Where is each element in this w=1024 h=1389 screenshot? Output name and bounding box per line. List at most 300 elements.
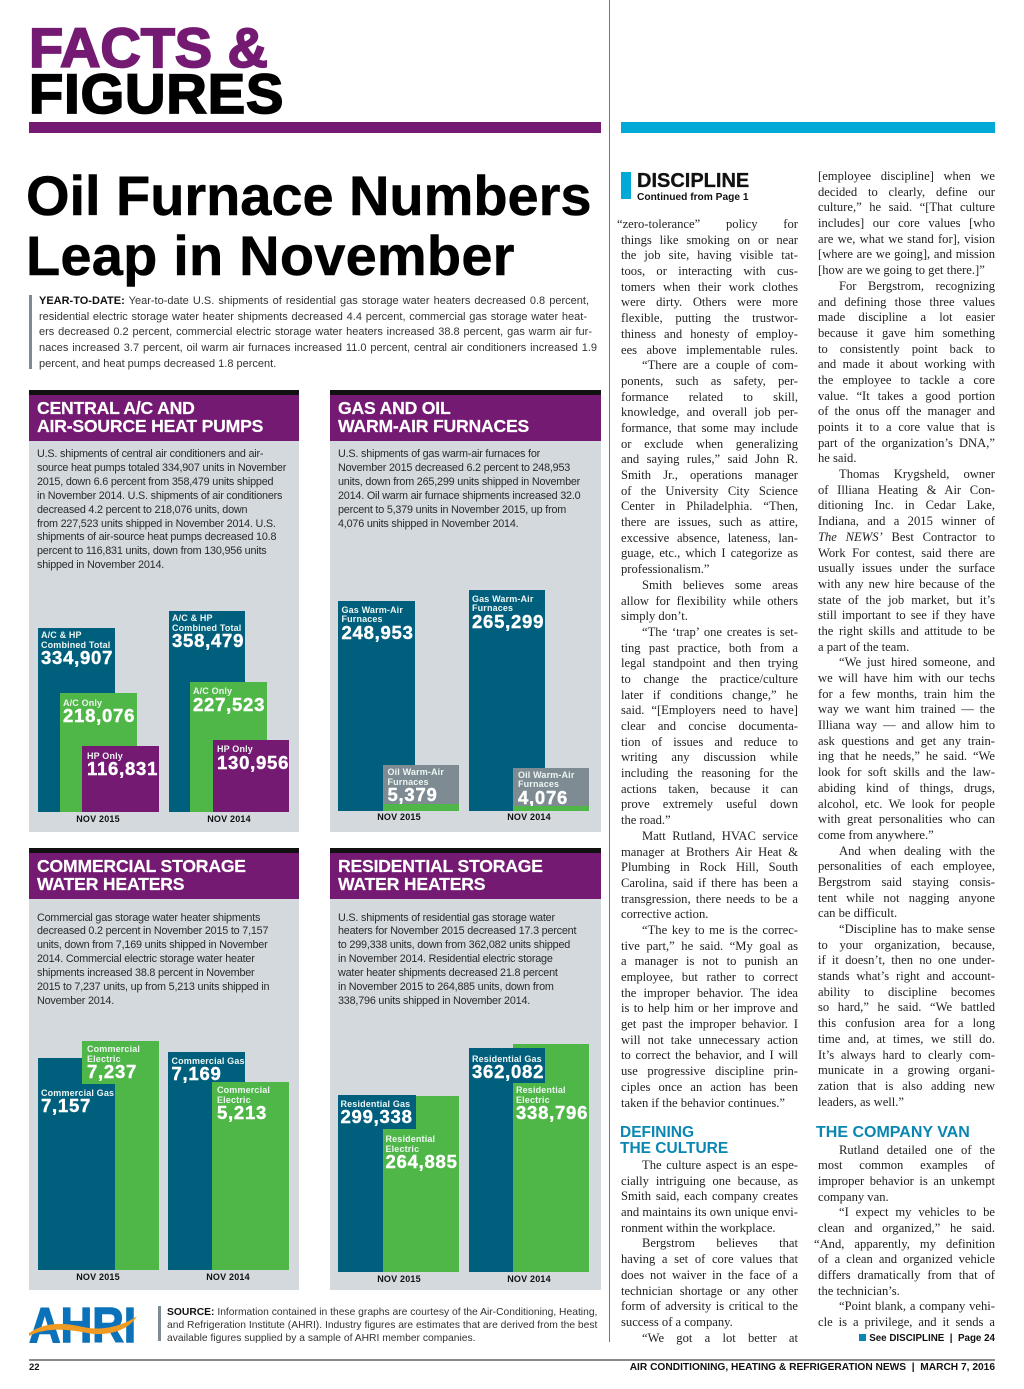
label box: commercial electric 2015: 7,237: [87, 1061, 137, 1082]
article column 1: to correct the behavior, and I will: [621, 1048, 798, 1062]
panel text: percent to 116,831 units, down from 130,956 units: [37, 545, 266, 557]
panel text: decreased 0.2 percent in November 2015 to 7,157: [37, 925, 268, 937]
article column 2: made discipline a lot easier: [818, 310, 995, 324]
source accent bar: [158, 1306, 161, 1341]
panel heading: [330, 848, 601, 899]
article column 2: the employee to tackle a core: [818, 373, 995, 387]
article column 2: and made it about working with: [818, 357, 995, 371]
panel text: decreased 4.2 percent to 218,076 units, down: [37, 504, 247, 516]
heading: Discipline: [637, 170, 749, 203]
article column 1: knowledge, and overall job per-: [621, 405, 798, 419]
bar: commercial electric 2014: Electric: [217, 1094, 251, 1104]
bar: A/C & HP 2015: [38, 628, 115, 812]
article column 1: “The ‘trap’ one creates is set-: [642, 625, 798, 639]
panel text: to 299,338 units, down from 362,082 units shipped: [338, 939, 570, 951]
panel text: 2014. Commercial electric storage water heater: [37, 953, 255, 965]
panel background: [29, 440, 299, 832]
article column 1: ees above implementable rules.: [621, 342, 798, 356]
article column 1: “zero-tolerance” policy for: [617, 217, 798, 231]
article column 2: tent while not nagging anyone: [818, 891, 995, 905]
article column 2: leaders, as well.”: [818, 1095, 904, 1109]
purple rule: [29, 122, 601, 133]
intro: year-to-date text: residential electric storage water heater shipments decreased 4.4 percent, commercial gas storage water heat-: [39, 311, 587, 323]
article column 2: Work For contest, said there are: [818, 546, 995, 560]
bar: gas furnaces 2015: [338, 601, 415, 811]
article column 1: said. “[Employers need to have]: [621, 703, 798, 717]
article column 1: allow for flexibility while others: [621, 594, 798, 608]
article column 2 lower: company van.: [818, 1190, 889, 1204]
article column 2: the right skills and attitude to be: [818, 624, 995, 638]
article column 2 lower: cle is a privilege, and it sends a: [818, 1315, 995, 1329]
intro: year-to-date text: percent, and heat pumps decreased 1.8 percent.: [39, 358, 276, 370]
bar: HP only 2015: 116,831: [87, 758, 158, 779]
bar: gas furnaces 2015: Furnaces: [342, 614, 383, 624]
article column 2: if it doesn’t, then no one under-: [818, 953, 995, 967]
article column 1 lower: Bergstrom believes that: [642, 1236, 798, 1250]
article column 1: the job site, having visible tat-: [621, 248, 798, 262]
bar: A/C only 2015: [60, 693, 137, 812]
article column 2: ability to discipline becomes: [818, 985, 995, 999]
panel: residential storage water heaters: 338,796 units shipped in November 2014.: [338, 995, 530, 1007]
label box: commercial electric 2015: Electric: [87, 1054, 121, 1064]
article column 2 lower: clean and organized,” he said.: [818, 1221, 995, 1235]
article column 2: zation that is also adding new: [818, 1079, 995, 1093]
bar: residential electric 2015: 264,885: [386, 1151, 458, 1172]
bar: residential electric 2014: Electric: [516, 1094, 550, 1104]
article column 1 lower: The culture aspect is an espe-: [642, 1158, 798, 1172]
label box: residential gas 2015: [338, 1095, 416, 1129]
blue rule: [621, 122, 995, 133]
bar: commercial gas 2014: [168, 1052, 245, 1270]
subheading: Defining the Culture: [620, 1124, 728, 1157]
article column 2: ing that he needs,” he said. “We: [818, 749, 995, 763]
article column 1 lower: form of adversity is critical to the: [621, 1299, 798, 1313]
source note: and Refrigeration Institute (AHRI). Industry figures are estimates that are derived from the best: [167, 1320, 597, 1331]
article column 1 lower: cially intriguing one because, as: [621, 1174, 798, 1188]
label box: residential gas 2015: Residential Gas: [340, 1098, 410, 1108]
article column 1 lower: does not waiver in the face of a: [621, 1268, 798, 1282]
article column 2 lower: of a clean and organized vehicle: [818, 1252, 995, 1266]
article column 2: for a few months, train him the: [818, 687, 995, 701]
bar: commercial electric 2014: 5,213: [217, 1102, 267, 1123]
article column 2: alcohol, etc. We look for people: [818, 796, 995, 810]
article column 1: ciples once an action has been: [621, 1080, 798, 1094]
article column 2: time and, at times, we still do.: [818, 1032, 995, 1046]
subheading: Defining the Culture: DEFINING: [620, 1124, 694, 1141]
axis label: NOV 2014: [507, 1274, 551, 1284]
panel text: source heat pumps totaled 334,907 units in November: [37, 462, 286, 474]
axis label: NOV 2015: [377, 1274, 421, 1284]
panel text: from 227,523 units shipped in November 2014. U.S.: [37, 518, 276, 530]
article column 2: ditioning Inc. in Cedar Lake,: [818, 498, 995, 512]
panel text: [37, 912, 269, 1007]
article column 2: “Discipline has to make sense: [839, 922, 995, 936]
article column 2: [where are we going], and mission: [818, 247, 995, 261]
panel heading: AIR-SOURCE HEAT PUMPS: [37, 416, 263, 436]
article column 2: For Bergstrom, recognizing: [839, 279, 995, 293]
article column 1: tomers when their work clothes: [621, 280, 798, 294]
bar: A/C & HP 2015: 334,907: [41, 647, 113, 668]
page number: 22: [29, 1362, 40, 1373]
bar: gas furnaces 2015: Gas Warm-Air: [342, 604, 403, 614]
article column 2: Thomas Krygsheld, owner: [839, 467, 995, 481]
bar: commercial electric 2014: [212, 1082, 289, 1270]
article column 1: corrective action.: [621, 907, 708, 921]
article column 2: can be difficult.: [818, 906, 897, 920]
intro: year-to-date text: naces increased 3.7 percent, oil warm air furnaces increased 11.0 percent, central air conditioners increased 1.9: [39, 342, 597, 354]
article column 1: writing any discussion while: [621, 750, 798, 764]
bar: commercial gas 2015: 7,157: [41, 1095, 91, 1116]
article column 2: way we want him trained — the: [818, 702, 995, 716]
panel text: November 2014.: [37, 995, 114, 1007]
axis label: NOV 2015: [76, 814, 120, 824]
article column 1: actions taken, because it can: [621, 782, 798, 796]
bar: A/C & HP 2014: [169, 611, 245, 812]
article column 2: culture,” he said. “[That culture: [818, 200, 995, 214]
panel background: [330, 898, 601, 1290]
article column 2 lower: differs dramatically from that of: [818, 1268, 995, 1282]
article column 1: Smith believes some areas: [642, 578, 798, 592]
article column 2: ask questions and get any train-: [818, 734, 995, 748]
bar: oil furnaces 2014: Oil Warm-Air: [518, 770, 574, 780]
article column 2: points it to a core value that is: [818, 420, 995, 434]
bar: commercial gas 2015: [38, 1058, 115, 1270]
bar: A/C only 2014: 227,523: [193, 694, 265, 714]
bar: gas furnaces 2014: 265,299: [472, 610, 544, 632]
bar: oil furnaces 2014: Furnaces: [518, 779, 559, 789]
article column 2: includes] our core values [who: [818, 216, 995, 230]
article column 2: with great personalities who can: [818, 812, 995, 826]
jump line: see Discipline: See DISCIPLINE | Page 24: [869, 1333, 995, 1344]
title: Oil Furnace Numbers: [26, 164, 591, 227]
bar: A/C only 2014: [190, 682, 267, 812]
panel text: units, down from 265,299 units shipped in November: [338, 476, 580, 488]
article column 2: [employee discipline] when we: [818, 169, 995, 183]
article column 1: and saying rules,” said John R.: [621, 452, 798, 466]
bar: residential electric 2015: Residential: [386, 1134, 435, 1144]
footer publication line: AIR CONDITIONING, HEATING & REFRIGERATION NEWS | MARCH 7, 2016: [630, 1362, 995, 1373]
panel heading: [29, 390, 299, 441]
article column 1: will not take unnecessary action: [621, 1033, 798, 1047]
article column 2: look for soft skills and the law-: [818, 765, 995, 779]
bar: oil furnaces 2015: 5,379: [388, 784, 438, 805]
article column 1 lower: [621, 1158, 798, 1345]
panel heading: [29, 848, 299, 899]
label box: residential gas 2014: 362,082: [472, 1061, 544, 1082]
bar: A/C & HP 2014: Combined Total: [172, 623, 241, 633]
article column 1: Center in Philadelphia. “Then,: [621, 499, 798, 513]
bar: commercial electric 2014: Commercial: [217, 1085, 270, 1095]
article column 2: a part of the team.: [818, 640, 909, 654]
article column 1: clear and concise documenta-: [621, 719, 798, 733]
panel heading: WARM-AIR FURNACES: [338, 416, 529, 436]
intro: year-to-date text: ers decreased 0.2 percent, commercial electric storage water heaters increased 38.8 percent, gas warm air fur-: [39, 326, 592, 338]
bar: HP only 2015: HP Only: [87, 750, 123, 760]
bar: gas furnaces 2014: [469, 590, 545, 811]
bar: HP only 2014: 130,956: [217, 752, 289, 772]
panel: central A/C and heat pumps: [29, 390, 299, 832]
title: [26, 164, 591, 287]
article column 1: manager at Brothers Air Heat &: [621, 844, 798, 858]
article column 1: Matt Rutland, HVAC service: [642, 829, 798, 843]
panel text: shipments increased 38.8 percent in November: [37, 967, 254, 979]
panel text: U.S. shipments of residential gas storage water: [338, 912, 555, 924]
bar: gas furnaces 2015: 248,953: [342, 622, 414, 642]
article column 2: municate in a growing organi-: [818, 1063, 995, 1077]
article column 1: ponents, such as safety, per-: [621, 374, 798, 388]
panel heading: [330, 390, 601, 441]
title: Leap in November: [26, 224, 515, 287]
article column 1: ting past practice, both from a: [621, 641, 798, 655]
article column 1: formance related to skill,: [621, 390, 798, 404]
label box: residential gas 2015: 299,338: [340, 1106, 413, 1127]
article column 2: and defining those three values: [818, 294, 995, 308]
panel text: U.S. shipments of central air conditioners and air-: [37, 448, 263, 460]
panel text: water heater shipments decreased 21.8 percent: [338, 967, 558, 979]
article column 1: tive part,” he said. “My goal as: [621, 939, 798, 953]
axis label: NOV 2014: [206, 1272, 250, 1282]
article column 2: come from anywhere.”: [818, 828, 934, 842]
article column 2 lower: the technician’s.: [818, 1284, 900, 1298]
bar: A/C & HP 2014: A/C & HP: [172, 613, 213, 623]
bar: oil furnaces 2015: Oil Warm-Air: [388, 767, 444, 777]
article column 2: Indiana, and a 2015 winner of: [818, 514, 995, 528]
article column 1 lower: Smith said, each company creates: [621, 1189, 798, 1203]
article column 1 lower: having a set of core values that: [621, 1252, 798, 1266]
article column 1: transgression, there needs to be a: [621, 892, 798, 906]
article column 2: personalities of each employee,: [818, 859, 995, 873]
panel background: [29, 898, 299, 1290]
article column 2: to consistently point back to: [818, 342, 995, 356]
panel heading: COMMERCIAL STORAGE: [37, 856, 246, 876]
article column 1: the improper behavior. The idea: [621, 986, 798, 1000]
article column 1: get past the improper behavior. I: [621, 1017, 798, 1031]
article column 1 lower: technician shortage or any other: [621, 1284, 798, 1298]
article column 2: still important to see if they have: [818, 608, 995, 622]
axis label: NOV 2014: [207, 814, 251, 824]
article column 2 lower: [814, 1142, 995, 1329]
article column 2 lower: “Point blank, a company vehi-: [839, 1299, 995, 1313]
article column 1 lower: success of a company.: [621, 1315, 733, 1329]
article column 2: this confusion area for a long: [818, 1016, 995, 1030]
bar: commercial gas 2014: 7,169: [172, 1063, 222, 1084]
panel text: in November 2015 to 264,885 units, down from: [338, 981, 554, 993]
article column 2: stands what’s right and account-: [818, 969, 995, 983]
bar: commercial gas 2015: Commercial Gas: [41, 1088, 114, 1098]
article column 1: “There are a couple of com-: [642, 358, 798, 372]
article column 1 lower: ronment within the workplace.: [621, 1221, 776, 1235]
panel text: November 2015 decreased 6.2 percent to 248,953: [338, 462, 570, 474]
panel text: 2015, down 6.6 percent from 358,479 units shipped: [37, 476, 273, 488]
article column 1: toos, or interacting with cus-: [621, 264, 798, 278]
article column 2: he said.: [818, 451, 856, 465]
article column 1: simply don’t.: [621, 609, 688, 623]
bar: residential electric 2015: Electric: [386, 1144, 419, 1154]
intro: year-to-date text: [39, 295, 597, 370]
article column 1: the road.”: [621, 813, 671, 827]
panel text: percent to 5,379 units in November 2015, up from: [338, 504, 566, 516]
subheading: Defining the Culture: THE CULTURE: [620, 1140, 728, 1157]
panel text: in November 2014. Residential electric storage: [338, 953, 553, 965]
panel text: 4,076 units shipped in November 2014.: [338, 518, 518, 530]
panel: gas and oil furnaces: [330, 390, 601, 832]
label box: residential gas 2014: [469, 1048, 545, 1083]
article column 1: [617, 217, 798, 1110]
article column 2: value. “It takes a good portion: [818, 389, 995, 403]
label box: residential gas 2014: Residential Gas: [472, 1054, 542, 1064]
article column 1: including the reasoning for the: [621, 766, 798, 780]
bar: HP only 2015: [82, 746, 159, 812]
panel heading: WATER HEATERS: [338, 874, 485, 894]
article column 2: Bergstrom said staying consis-: [818, 875, 995, 889]
article column 1: of the University City Science: [621, 484, 798, 498]
article column 2: “We just hired someone, and: [839, 655, 995, 669]
panel text: in November 2014. U.S. shipments of air conditioners: [37, 490, 282, 502]
article column 1: tion of issues and reduce to: [621, 735, 798, 749]
article column 2: usually issues under the surface: [818, 561, 995, 575]
axis label: NOV 2015: [76, 1272, 120, 1282]
article column 1: professionalism.”: [621, 562, 710, 576]
article column 1: employee, but rather to correct: [621, 970, 798, 984]
green strip: [513, 806, 589, 811]
panel: commercial storage water heaters: [29, 848, 299, 1290]
label box: commercial electric 2015: Commercial: [87, 1044, 140, 1054]
panel text: shipped in November 2014.: [37, 559, 164, 571]
article column 1: formance, that some may include: [621, 421, 798, 435]
footer rule: [29, 1359, 995, 1361]
bar: HP only 2014: HP Only: [217, 744, 253, 754]
subheading: The Company Van: THE COMPANY VAN: [816, 1124, 970, 1141]
bar: A/C only 2014: A/C Only: [193, 686, 232, 696]
bar: residential gas 2015: [338, 1095, 415, 1272]
article column 2: are we, what we stand for], vision: [818, 232, 995, 246]
article column 2: we will have him with our techs: [818, 671, 995, 685]
source note: SOURCE: Information contained in these graphs are courtesy of the Air-Conditioning, Heating,: [167, 1306, 597, 1318]
bar: A/C only 2015: A/C Only: [63, 698, 102, 708]
panel text: [338, 912, 576, 1007]
article column 2 lower: “And, apparently, my definition: [814, 1237, 995, 1251]
bar: residential electric 2014: 338,796: [516, 1102, 588, 1123]
article column 1 lower: and maintains its own unique envi-: [621, 1205, 798, 1219]
bar: A/C only 2015: 218,076: [63, 705, 135, 726]
heading: Facts & Figures: FACTS &: [29, 16, 268, 79]
bar: A/C & HP 2015: A/C & HP: [41, 630, 82, 640]
heading: Facts & Figures: [29, 16, 284, 125]
panel text: Commercial gas storage water heater shipments: [37, 912, 260, 924]
heading: Discipline: DISCIPLINE: [637, 170, 749, 192]
article column 2: so hard,” he said. “We battled: [818, 1000, 995, 1014]
bar: commercial electric 2015: [82, 1041, 159, 1270]
label box: commercial electric 2015: [82, 1041, 159, 1084]
article column 1: or exclude when generalizing: [621, 437, 798, 451]
article column 2: And when dealing with the: [839, 844, 995, 858]
panel text: U.S. shipments of gas warm-air furnaces for: [338, 448, 540, 460]
bar: oil furnaces 2014: 4,076: [518, 786, 568, 808]
article column 2: decided to clearly, define our: [818, 185, 995, 199]
article column 1: is to help him or her improve and: [621, 1001, 798, 1015]
bar: residential electric 2014: [513, 1044, 589, 1272]
panel text: 2015 to 7,237 units, up from 5,213 units shipped in: [37, 981, 269, 993]
article column 2: It’s always hard to clearly com-: [818, 1048, 995, 1062]
vertical divider: [609, 0, 610, 1342]
bar: gas furnaces 2014: Gas Warm-Air: [472, 594, 533, 604]
article column 2: with any new hire because of the: [818, 577, 995, 591]
bar: A/C & HP 2014: 358,479: [172, 630, 244, 651]
panel text: [37, 448, 286, 571]
panel background: [330, 440, 601, 832]
article column 1: to change the practice/culture: [621, 672, 798, 686]
panel heading: RESIDENTIAL STORAGE: [338, 856, 543, 876]
article column 1 lower: “We got a lot better at: [642, 1331, 798, 1345]
article column 2: The NEWS’ Best Contractor to: [818, 530, 995, 544]
article column 2 lower: Rutland detailed one of the: [839, 1142, 995, 1156]
article column 1: Smith Jr., operations manager: [621, 468, 798, 482]
bar: gas furnaces 2014: Furnaces: [472, 603, 513, 613]
panel text: [338, 448, 580, 530]
article column 1: use progressive discipline prin-: [621, 1064, 798, 1078]
bar: A/C & HP 2015: Combined Total: [41, 640, 110, 650]
article column 2: Illiana way — and allow him to: [818, 718, 995, 732]
article column 2 lower: “I expect my vehicles to be: [839, 1205, 995, 1219]
article column 2: of the onus off the manager and: [818, 404, 995, 418]
article column 2: [818, 169, 995, 1109]
article column 2: of Illiana Heating & Air Con-: [818, 483, 995, 497]
bar: oil furnaces 2015: Furnaces: [388, 776, 429, 786]
green strip: [383, 804, 459, 811]
article column 1: there are issues, such as attire,: [621, 515, 798, 529]
article column 1: legal standpoint and then trying: [621, 656, 798, 670]
article column 1: were dirty. Others were more: [621, 295, 798, 309]
source note: [167, 1306, 598, 1344]
article column 2: to your organization, because,: [818, 938, 995, 952]
article column 2 lower: improper behavior is an unkempt: [818, 1174, 995, 1188]
source note: available figures supplied by a sample of AHRI member companies.: [167, 1333, 476, 1344]
heading: Discipline: Continued from Page 1: [637, 192, 749, 203]
intro: year-to-date text: YEAR-TO-DATE: Year-to-date U.S. shipments of residential gas storage water heaters decreased 0.8 percent,: [39, 295, 589, 307]
bar: commercial gas 2014: Commercial Gas: [172, 1056, 245, 1066]
panel text: 2014. Oil warm air furnace shipments increased 32.0: [338, 490, 580, 502]
heading: Facts & Figures: FIGURES: [29, 62, 284, 125]
article column 2: state of the job market, but it’s: [818, 593, 995, 607]
panel text: heaters for November 2015 decreased 17.3 percent: [338, 925, 576, 937]
bar: oil furnaces 2015: [383, 765, 459, 811]
article column 1: excessive absence, lateness, lan-: [621, 531, 798, 545]
panel text: shipments of air-source heat pumps decreased 10.8: [37, 531, 276, 543]
article column 1: Plumbing in Rock Hill, South: [621, 860, 798, 874]
article column 2: because it gave him something: [818, 326, 995, 340]
bar: HP only 2014: [213, 740, 289, 812]
axis label: NOV 2014: [507, 812, 551, 822]
article column 1: taken if the behavior continues.”: [621, 1096, 785, 1110]
axis label: NOV 2015: [377, 812, 421, 822]
discipline marker: [621, 172, 631, 199]
article column 2: [how are we going to get there.]”: [818, 263, 985, 277]
article column 2: abiding kind of things, drugs,: [818, 781, 995, 795]
article column 1: later if conditions change,” he: [621, 688, 798, 702]
article column 1: Carolina, said if there has been a: [621, 876, 798, 890]
article column 1: “The key to me is the correc-: [642, 923, 798, 937]
panel heading: WATER HEATERS: [37, 874, 184, 894]
bar: residential gas 2014: [469, 1048, 545, 1272]
article column 1: prove extremely useful down: [621, 797, 798, 811]
panel heading: GAS AND OIL: [338, 398, 450, 418]
article column 1: guage, etc., which I categorize as: [621, 546, 798, 560]
article column 2: part of the organization’s DNA,”: [818, 436, 995, 450]
article column 1: thiness and honesty of employ-: [621, 327, 798, 341]
bar: residential electric 2015: [383, 1096, 459, 1272]
article column 1: a manager is not to punish an: [621, 954, 798, 968]
article column 1: flexible, putting the trustwor-: [621, 311, 798, 325]
